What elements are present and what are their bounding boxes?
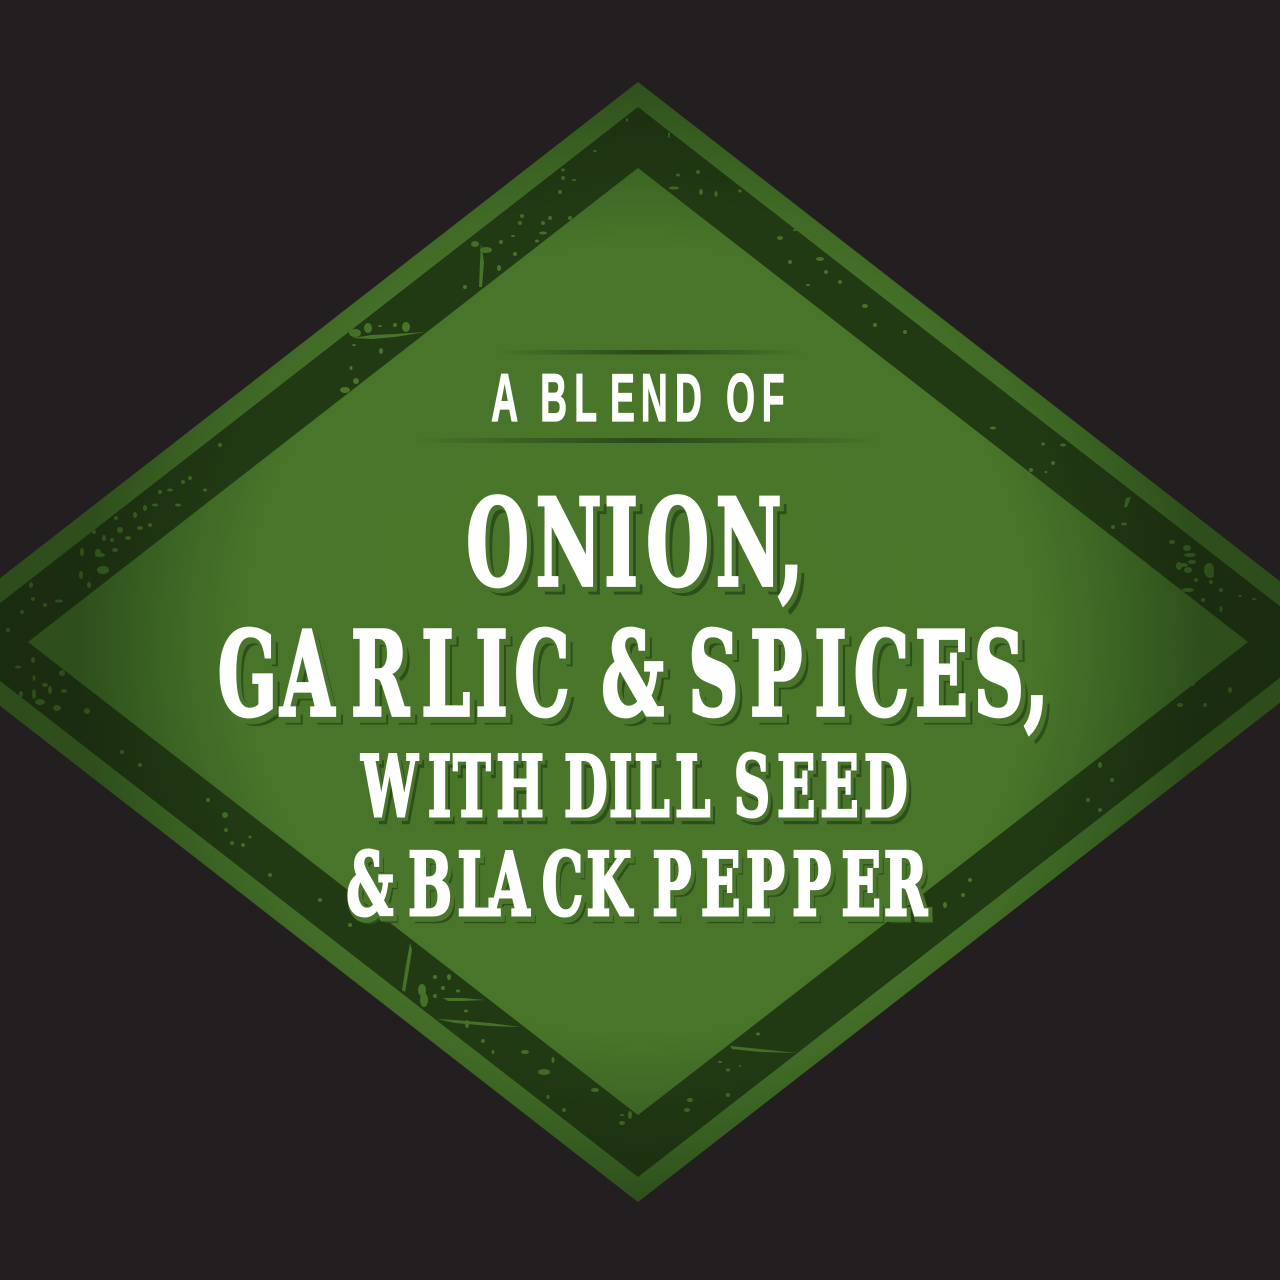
line: a blend of: A BLEND OF — [491, 359, 785, 436]
line: onion: ONION, — [466, 473, 803, 614]
inner green diamond — [28, 168, 1248, 1115]
line: garlic and spices: GARLIC & SPICES, — [221, 609, 1051, 746]
line: onion: ONION, — [469, 476, 806, 617]
line: black pepper: & BLACK PEPPER — [348, 836, 930, 938]
line: garlic and spices: GARLIC & SPICES, — [225, 614, 1055, 751]
line: garlic and spices: GARLIC & SPICES, — [218, 606, 1048, 743]
line: with dill seed: WITH DILL SEED — [360, 738, 908, 837]
top rule — [495, 350, 805, 354]
line: onion: ONION, — [473, 481, 810, 622]
bottom rule — [410, 438, 885, 443]
line: with dill seed: WITH DILL SEED — [362, 740, 910, 839]
line: with dill seed: WITH DILL SEED — [365, 745, 913, 844]
line: black pepper: & BLACK PEPPER — [351, 841, 933, 943]
line: black pepper: & BLACK PEPPER — [346, 834, 928, 936]
distressed specks and cracks — [6, 118, 1256, 1125]
